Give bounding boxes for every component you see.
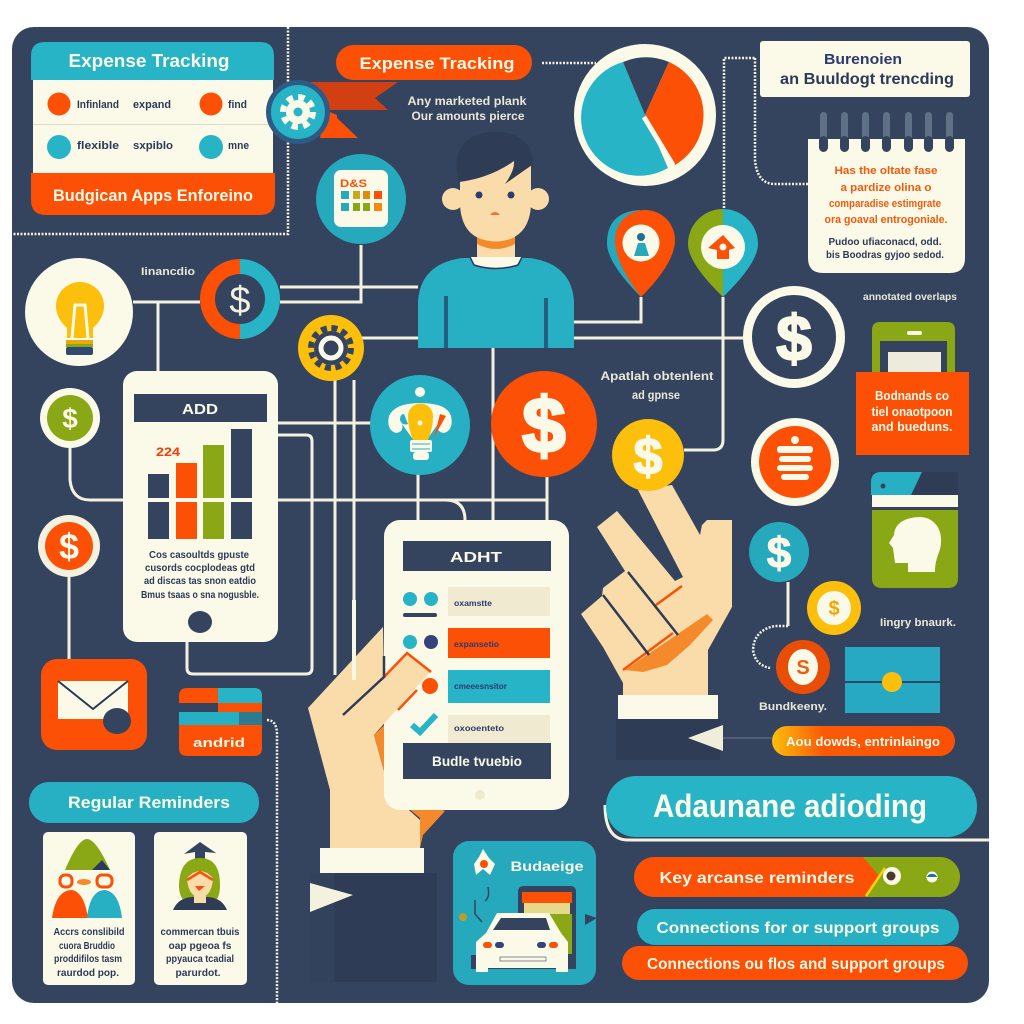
icon: teal coin xyxy=(749,522,809,582)
caption: top centre: Our amounts pierce xyxy=(412,109,525,123)
panel: expense tracking card: expand xyxy=(133,99,171,111)
card: reminder group: cuora Bruddio xyxy=(59,941,115,952)
panel: notepad: Has the oltate fase xyxy=(834,165,938,177)
panel: phone with list: ADHT xyxy=(450,549,502,566)
panel: phone with list xyxy=(384,520,569,810)
panel: phone with bar chart: cusords cocplodeas gtd xyxy=(145,563,255,574)
panel: phone with list: oxooenteto xyxy=(454,724,504,733)
panel: phone with bar chart xyxy=(123,371,278,642)
panel: green phone with orange box: tiel onaotpoon xyxy=(872,404,953,419)
label: application xyxy=(600,369,714,402)
label: annotated overlaps: annotated overlaps xyxy=(863,292,957,303)
pill: small note: Aou dowds, entrinlaingo xyxy=(786,734,940,749)
label: financial: Iinancdio xyxy=(141,266,195,278)
panel: notepad xyxy=(808,112,965,273)
label: application: ad gpnse xyxy=(632,388,680,402)
panel: phone with bar chart: ADD xyxy=(182,401,218,418)
caption: top centre: Any marketed plank xyxy=(408,94,527,108)
card: reminder person xyxy=(154,832,247,985)
icon: yellow coin xyxy=(612,419,684,491)
icon: green coin: $ xyxy=(62,403,78,434)
panel: notepad: bis Boodras gyjoo sedod. xyxy=(826,250,944,261)
panel: expense tracking card: sxpiblo xyxy=(133,140,173,152)
icon: yellow coin: $ xyxy=(634,428,663,486)
icon: orange coin: $ xyxy=(59,526,79,567)
panel: notepad: ora goaval entrogoniale. xyxy=(824,214,948,226)
card: reminder person: oap pgeoa fs xyxy=(168,941,232,952)
icon: calendar app xyxy=(316,154,406,244)
card: reminder person: parurdot. xyxy=(176,968,221,979)
card: reminder group: Accrs conslibild xyxy=(54,927,124,938)
bar chart: 224 xyxy=(156,445,180,459)
illustration: pointing hand xyxy=(581,485,732,760)
icon: yellow small coin: $ xyxy=(828,598,840,620)
icon: gear badge xyxy=(266,80,330,144)
icon: idea circle xyxy=(370,375,470,475)
panel: green phone with orange box xyxy=(856,322,969,455)
pill: connections orange xyxy=(622,946,968,980)
panel: expense tracking card: Infinland xyxy=(77,99,119,111)
panel: expense tracking card: flexible xyxy=(77,140,119,152)
pill: connections orange: Connections ou flos and support groups xyxy=(647,956,945,973)
panel: green phone with orange box: and bueduns. xyxy=(872,419,952,434)
icon: calendar app: D&S xyxy=(340,178,367,190)
pie chart xyxy=(574,44,716,186)
panel: phone with list: cmeeesnsitor xyxy=(454,682,507,691)
card: reminder person: ppyauca tcadial xyxy=(166,954,234,965)
panel: phone with list: Budle tvuebio xyxy=(432,753,522,769)
pill: key expense reminders xyxy=(634,857,960,897)
heading box: budget trending: an Buuldogt trencding xyxy=(780,71,954,88)
card: reminder group: proddifilos tasm xyxy=(54,954,122,965)
panel: expense tracking card: find xyxy=(228,99,247,111)
panel: green phone with orange box: Bodnands co xyxy=(875,388,949,403)
icon: orange small coin: S xyxy=(796,657,810,679)
heading box: budget trending: Burenoien xyxy=(824,51,902,68)
icon: large orange dollar xyxy=(491,371,597,477)
illustration: holding hand sleeve xyxy=(310,848,437,982)
illustration: holding hand palm xyxy=(308,627,445,848)
illustration: person xyxy=(418,132,574,348)
icon: ribbon xyxy=(310,82,398,138)
icon: dollar split ring xyxy=(200,259,280,339)
heading pill: main xyxy=(606,776,977,837)
panel: phone with bar chart: ad discas tas snon eatdio xyxy=(144,576,256,587)
card: android xyxy=(179,688,262,756)
icon: teal envelope box xyxy=(845,647,940,713)
icon: envelope xyxy=(41,659,147,750)
pill: small note xyxy=(772,726,955,756)
card: reminder group xyxy=(43,832,135,985)
heading pill: regular reminders xyxy=(29,782,259,823)
illustration: holding hand thumb xyxy=(343,600,431,745)
panel: phone with list: oxamstte xyxy=(454,599,493,608)
pill: connections teal xyxy=(637,909,959,945)
panel: phone with bar chart: Cos casoultds gpuste xyxy=(149,550,249,561)
icon: dollar ring dark xyxy=(743,286,845,388)
icon: dollar ring dark: $ xyxy=(776,302,812,374)
label: energy brand: Iingry bnaurk. xyxy=(880,617,956,629)
panel: expense tracking card: Expense Tracking xyxy=(68,51,230,71)
label: application: Apatlah obtenlent xyxy=(600,369,714,383)
panel: phone with bar chart: Bmus tsaas o sna nogusble. xyxy=(141,590,259,601)
panel: notepad: comparadise estimgrate xyxy=(829,198,941,210)
panel: car budgeting: Budaeige xyxy=(510,858,584,874)
panel: expense tracking card xyxy=(31,42,275,215)
heading box: budget trending xyxy=(760,41,970,97)
pill heading: expense tracking: Expense Tracking xyxy=(360,54,514,73)
heading pill: main: Adaunane adioding xyxy=(653,788,927,824)
icon: orange small coin xyxy=(776,640,830,694)
label: budgetary: Bundkeeny. xyxy=(759,701,827,713)
icon: green coin xyxy=(40,388,100,448)
panel: green head card xyxy=(871,472,958,588)
pill: key expense reminders: Key arcanse reminders xyxy=(660,870,855,887)
card: android: andrid xyxy=(193,735,245,750)
icon: dollar split ring: $ xyxy=(229,280,251,322)
panel: expense tracking card: mne xyxy=(228,140,249,152)
icon: large orange dollar: $ xyxy=(522,381,566,469)
icon: map pin green xyxy=(688,209,758,297)
icon: yellow small coin xyxy=(807,581,861,635)
panel: expense tracking card: Budgican Apps Enforeino xyxy=(53,186,253,205)
pill heading: expense tracking xyxy=(336,45,532,80)
icon: gear yellow xyxy=(298,315,364,381)
card: reminder group: raurdod pop. xyxy=(57,968,119,979)
panel: notepad: Pudoo ufiaconacd, odd. xyxy=(828,237,942,248)
icon: lightbulb xyxy=(25,258,133,366)
icon: striped coin xyxy=(751,418,839,506)
icon: map pin orange xyxy=(607,210,675,297)
panel: car budgeting xyxy=(453,841,597,985)
panel: notepad: a pardize olina o xyxy=(840,182,932,194)
bar chart xyxy=(146,429,254,539)
heading pill: regular reminders: Regular Reminders xyxy=(68,793,230,812)
icon: orange coin xyxy=(38,515,100,577)
panel: phone with list: expansetio xyxy=(454,640,499,649)
caption: top centre xyxy=(408,94,527,123)
icon: teal coin: $ xyxy=(767,529,791,578)
card: reminder person: commercan tbuis xyxy=(160,927,240,938)
pill: connections teal: Connections for or support groups xyxy=(656,920,940,937)
